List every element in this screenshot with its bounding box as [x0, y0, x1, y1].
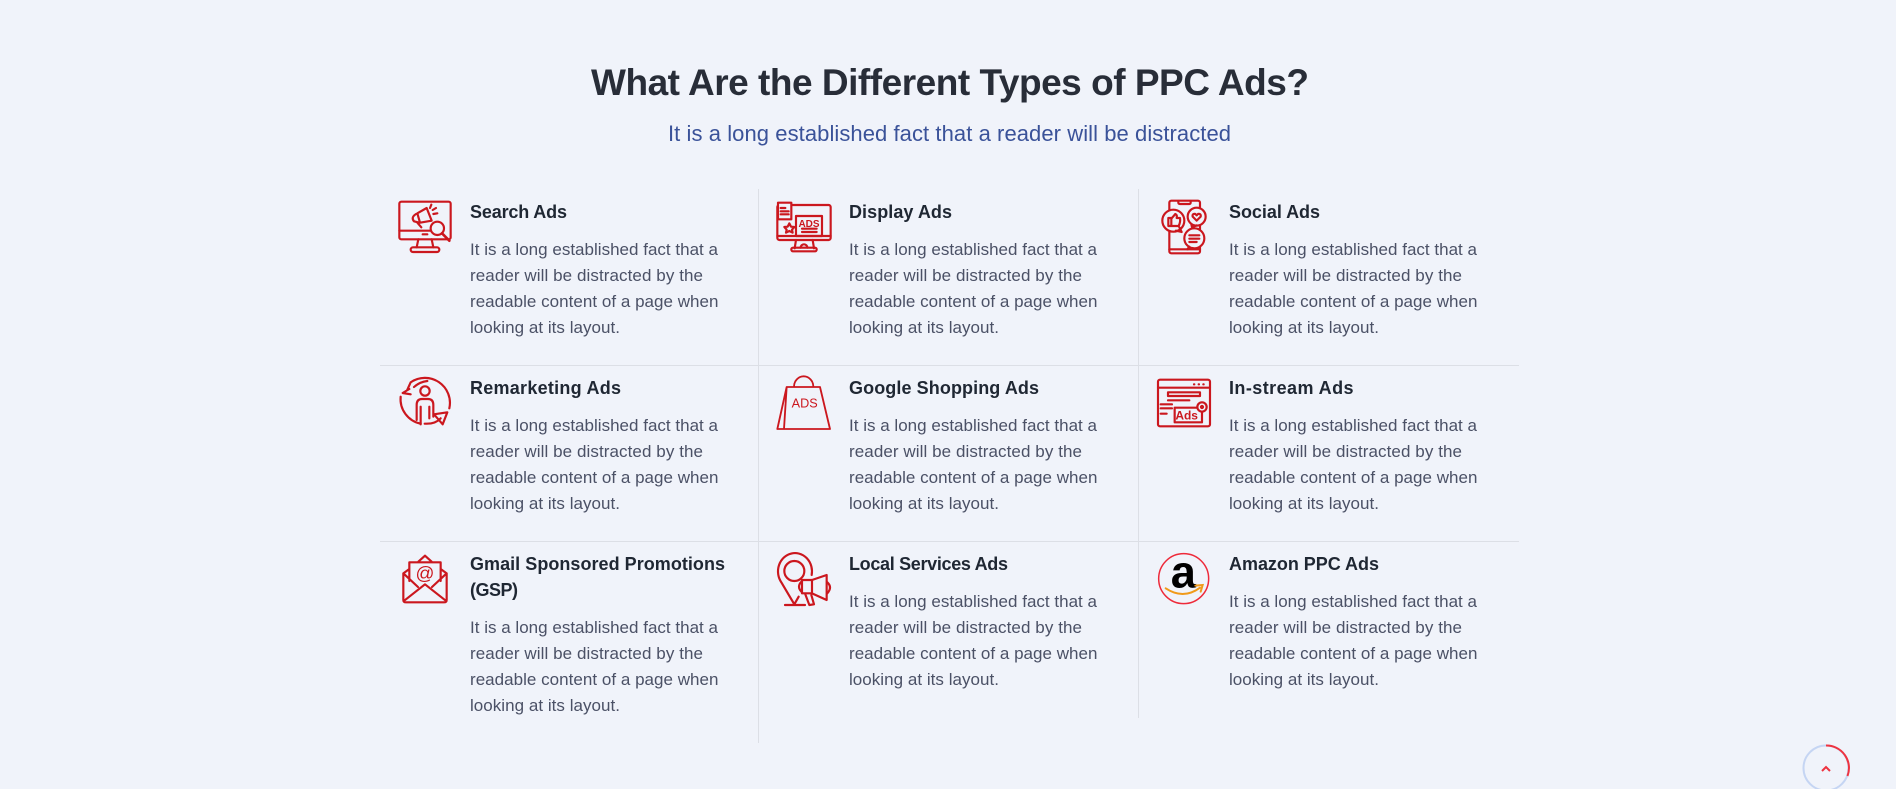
description: [849, 240, 1098, 337]
description: It is a long established fact that a: [849, 592, 1098, 611]
description: readable content of a page when: [470, 670, 718, 689]
icon: browser window with ad: [1158, 380, 1210, 426]
icon: envelope with at sign: [403, 556, 447, 602]
description: looking at its layout.: [470, 494, 620, 513]
description: looking at its layout.: [470, 696, 620, 715]
title: What Are the Different Types of PPC Ads?: [591, 62, 1309, 103]
icon: amazon logo: a: [1171, 546, 1197, 597]
heading: Remarketing Ads: [470, 378, 621, 398]
card: Local Services Ads: [778, 553, 1098, 689]
description: It is a long established fact that a: [470, 618, 719, 637]
heading: Social Ads: [1229, 202, 1320, 222]
description: It is a long established fact that a: [1229, 240, 1478, 259]
description: readable content of a page when: [1229, 292, 1478, 311]
description: readable content of a page when: [470, 468, 718, 487]
description: It is a long established fact that a: [1229, 416, 1478, 435]
heading: Google Shopping Ads: [849, 378, 1039, 398]
description: readable content of a page when: [1229, 468, 1478, 487]
description: reader will be distracted by the: [1229, 618, 1462, 637]
card: Amazon PPC Ads: [1159, 546, 1478, 689]
description: reader will be distracted by the: [470, 266, 703, 285]
description: readable content of a page when: [849, 292, 1098, 311]
heading: Local Services Ads: [849, 554, 1008, 574]
description: [470, 416, 719, 513]
description: looking at its layout.: [1229, 318, 1379, 337]
heading: In-stream Ads: [1229, 378, 1354, 398]
description: It is a long established fact that a: [849, 416, 1098, 435]
description: reader will be distracted by the: [1229, 266, 1462, 285]
description: [470, 240, 719, 337]
description: looking at its layout.: [470, 318, 620, 337]
description: looking at its layout.: [849, 318, 999, 337]
card: Remarketing Ads: [401, 378, 719, 513]
heading: (GSP): [470, 580, 518, 600]
description: It is a long established fact that a: [849, 240, 1098, 259]
icon: phone with social bubbles: [1162, 201, 1206, 253]
description: [1229, 416, 1478, 513]
card: Social Ads: [1162, 201, 1478, 337]
description: It is a long established fact that a: [1229, 592, 1478, 611]
card: Search Ads: [399, 202, 719, 337]
description: looking at its layout.: [849, 670, 999, 689]
icon: monitor with ad: ADS: [798, 219, 820, 230]
description: readable content of a page when: [1229, 644, 1478, 663]
description: reader will be distracted by the: [849, 442, 1082, 461]
subtitle: It is a long established fact that a reader will be distracted: [668, 121, 1231, 146]
description: It is a long established fact that a: [470, 240, 719, 259]
description: [470, 618, 719, 715]
icon: shopping bag: ADS: [792, 397, 818, 411]
icon: monitor with megaphone and magnifier: [399, 202, 451, 252]
card: Google Shopping Ads: [777, 376, 1098, 513]
description: reader will be distracted by the: [849, 266, 1082, 285]
heading: Search Ads: [470, 202, 567, 222]
description: [1229, 240, 1478, 337]
description: looking at its layout.: [1229, 494, 1379, 513]
heading: [470, 554, 725, 600]
icon: person with circular arrows: [401, 378, 450, 424]
description: [849, 416, 1098, 513]
card: Display Ads: [777, 202, 1098, 337]
description: readable content of a page when: [849, 644, 1098, 663]
icon: envelope with at sign: @: [416, 563, 434, 584]
icon: map pin with megaphone: [778, 553, 830, 605]
heading: Amazon PPC Ads: [1229, 554, 1379, 574]
description: reader will be distracted by the: [1229, 442, 1462, 461]
icon: shopping bag: [777, 376, 830, 429]
description: reader will be distracted by the: [470, 644, 703, 663]
heading: Gmail Sponsored Promotions: [470, 554, 725, 574]
scroll-to-top button: [1804, 745, 1849, 789]
description: reader will be distracted by the: [849, 618, 1082, 637]
description: It is a long established fact that a: [470, 416, 719, 435]
description: [1229, 592, 1478, 689]
icon: browser window with ad: Ads: [1175, 409, 1198, 423]
icon: monitor with ad: [777, 203, 831, 251]
description: readable content of a page when: [849, 468, 1098, 487]
icon: amazon logo: [1159, 546, 1209, 604]
description: [849, 592, 1098, 689]
description: looking at its layout.: [849, 494, 999, 513]
description: readable content of a page when: [470, 292, 718, 311]
card: Gmail Sponsored Promotions: [403, 554, 725, 715]
card: In-stream Ads: [1158, 378, 1478, 513]
description: looking at its layout.: [1229, 670, 1379, 689]
description: reader will be distracted by the: [470, 442, 703, 461]
heading: Display Ads: [849, 202, 952, 222]
